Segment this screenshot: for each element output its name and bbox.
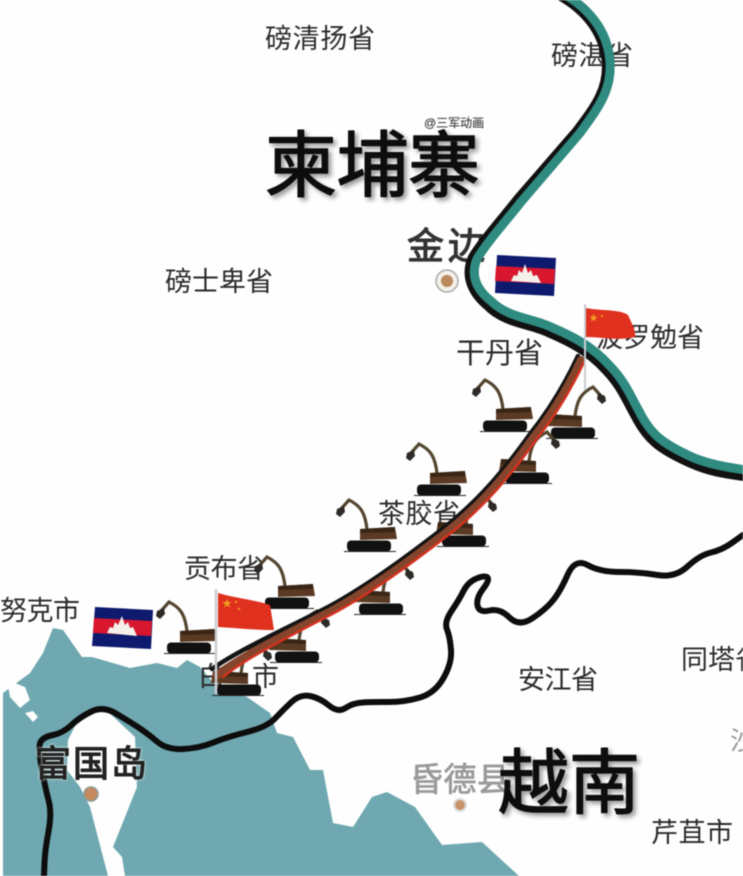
title: Vietnam: 越南 — [498, 745, 640, 824]
province labels: 努克市 — [0, 596, 80, 626]
island: Phu Quoc — [67, 706, 137, 876]
flag: China at Kampot end: ★ — [237, 606, 241, 611]
province labels: 市 — [252, 662, 279, 692]
province labels: 茶胶省 — [378, 499, 460, 529]
sea: Gulf of Thailand — [3, 628, 519, 876]
province labels: 磅士卑省 — [165, 267, 273, 297]
marker: Duc county — [454, 799, 466, 811]
flag: Cambodia near Kampot — [92, 607, 153, 649]
border: Cambodia-Vietnam — [39, 535, 743, 876]
label: Duc county: 昏德县 — [410, 761, 510, 798]
province labels: 干丹省 — [456, 337, 543, 370]
province labels: 贡布省 — [184, 554, 264, 584]
province labels: 芹苴市 — [651, 818, 733, 848]
flag: China at Kampot end — [216, 589, 274, 694]
province labels: 波罗勉省 — [596, 323, 704, 353]
flag: Cambodia near Phnom Penh — [495, 255, 556, 296]
province labels: 磅湛省 — [551, 41, 633, 71]
flag: China at Kampot end: ★ — [222, 599, 232, 610]
title: Cambodia: 柬埔寨 — [265, 127, 480, 207]
province labels: 安江省 — [518, 665, 598, 695]
flag: China at Mekong end: ★ — [600, 313, 604, 318]
flag: China at Kampot end: ★ — [234, 599, 238, 604]
flag: China at Mekong end — [585, 304, 635, 390]
province labels: 白 — [198, 662, 225, 692]
watermark: @三军动画 — [424, 116, 484, 130]
flag: China at Mekong end: ★ — [589, 313, 598, 323]
excavators — [156, 380, 606, 696]
label: Phu Quoc island: 富国岛 — [35, 743, 147, 784]
label: Phnom Penh: 金边 — [407, 226, 485, 267]
river: Mekong — [471, 0, 743, 475]
small islands — [7, 680, 38, 722]
marker: Phu Quoc — [84, 787, 98, 801]
province labels: 磅清扬省 — [265, 24, 375, 54]
marker: Phnom Penh — [436, 270, 458, 292]
canal route — [212, 356, 584, 677]
